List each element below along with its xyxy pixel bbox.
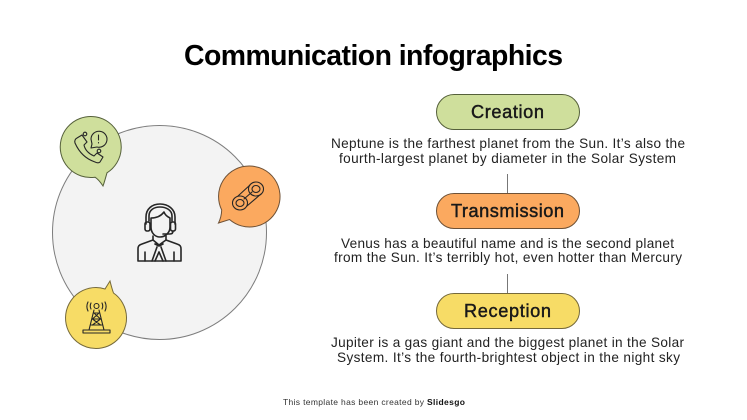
panel: creation (331, 94, 685, 166)
reception description: System. It’s the fourth-brightest object in the night sky (337, 350, 680, 365)
footer credit: Slidesgo (427, 397, 465, 407)
large background circle (52, 126, 266, 340)
transmission description: from the Sun. It’s terribly hot, even hotter than Mercury (334, 250, 682, 265)
footer credit: This template has been created by (283, 397, 425, 407)
transmission description: Venus has a beautiful name and is the second planet (341, 236, 674, 251)
creation description (331, 136, 685, 166)
icon: support agent with headset (138, 204, 181, 261)
connector: transmission to reception (506, 274, 508, 293)
creation description: fourth-largest planet by diameter in the Solar System (339, 151, 676, 166)
reception label: Reception (464, 301, 551, 321)
panel: reception (331, 294, 684, 365)
creation label: Creation (471, 102, 544, 122)
title: Communication infographics (184, 40, 563, 72)
icon: radio tower (83, 302, 110, 333)
transmission description (334, 236, 682, 265)
speech bubble: orange link (218, 166, 280, 227)
transmission label: Transmission (451, 201, 564, 221)
reception description (331, 335, 684, 365)
creation description: Neptune is the farthest planet from the Sun. It’s also the (331, 136, 685, 151)
speech bubble: yellow tower (66, 281, 127, 348)
connector: creation to transmission (506, 174, 508, 193)
reception description: Jupiter is a gas giant and the biggest planet in the Solar (331, 335, 684, 350)
panel: transmission (334, 194, 682, 265)
icon: chain link (232, 182, 264, 210)
reception pill (436, 294, 580, 328)
speech bubble: green phone (60, 116, 121, 186)
panel: circular diagram (52, 126, 266, 340)
icon: phone with alert message (75, 131, 107, 163)
creation pill (436, 94, 580, 130)
transmission pill (436, 194, 580, 228)
